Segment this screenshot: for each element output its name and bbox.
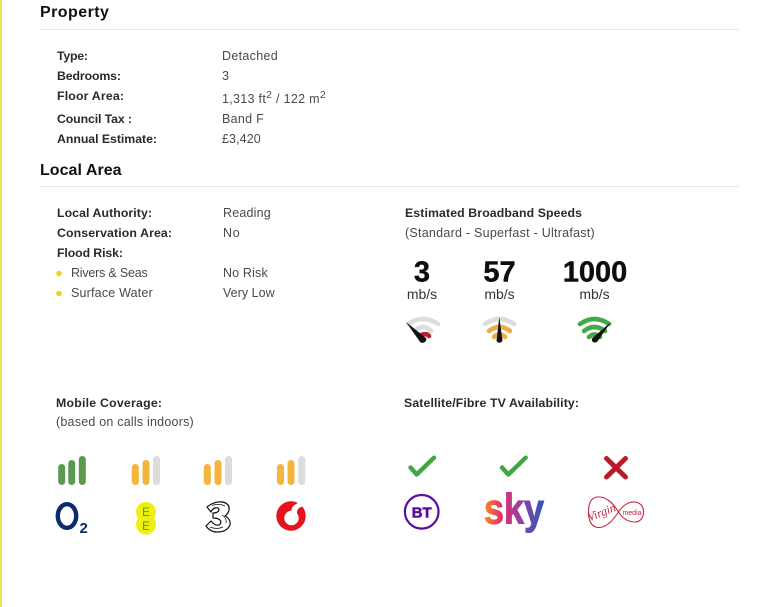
logo: EE [136, 502, 156, 534]
logo: BT [405, 495, 439, 529]
icon: red gauge [406, 319, 438, 343]
row: rivers and seas: Rivers & Seas [71, 266, 148, 280]
logo: EE: E [142, 507, 150, 519]
row: bedrooms: Bedrooms: [57, 69, 121, 83]
row: council tax: Band F [222, 112, 264, 126]
logo: Virgin Media: media [622, 510, 642, 517]
logo: EE: E [142, 521, 150, 533]
row: type: Type: [57, 49, 88, 63]
row: rivers and seas: No Risk [223, 266, 268, 280]
logo: Vodafone [276, 501, 306, 531]
signal bars: O2 [62, 460, 82, 482]
row: surface water [56, 286, 276, 300]
panel: property details [57, 49, 326, 146]
row: floor area: Floor Area: [57, 89, 124, 103]
row: annual estimate [57, 132, 261, 146]
row: rivers and seas [56, 266, 268, 280]
mobile coverage subheading: (based on calls indoors) [56, 415, 194, 429]
logo: Three [206, 502, 230, 532]
row: bedrooms [57, 69, 229, 83]
row: surface water: Very Low [223, 286, 276, 300]
signal bars: Three [207, 460, 228, 482]
signal bars: Vodafone [280, 460, 302, 482]
row: council tax [57, 112, 264, 126]
row: council tax: Council Tax : [57, 112, 132, 126]
icon: BT check [410, 458, 434, 474]
logo: O2: 2 [80, 520, 88, 537]
ultrafast speed: 1000 [563, 256, 627, 288]
standard speed [407, 256, 437, 302]
standard speed: 3 [414, 256, 430, 288]
row: conservation area: Conservation Area: [57, 226, 172, 240]
left yellow page edge [0, 0, 2, 607]
icon: Sky check [502, 458, 526, 474]
row: floor area: 2 [320, 89, 326, 101]
row: annual estimate: £3,420 [222, 132, 261, 146]
broadband heading: Estimated Broadband Speeds [405, 206, 582, 220]
TV availability heading: Satellite/Fibre TV Availability: [404, 396, 579, 410]
icon: green gauge [580, 319, 611, 343]
row: flood risk label: Flood Risk: [57, 246, 123, 260]
icon: amber gauge [485, 317, 514, 343]
heading: Local Area: Local Area [40, 162, 122, 179]
standard speed: mb/s [407, 286, 437, 302]
row: conservation area [57, 226, 240, 240]
row: conservation area: No [223, 226, 240, 240]
superfast speed: mb/s [484, 286, 515, 302]
row: floor area: 1,313 ft [222, 92, 266, 106]
row: type: Detached [222, 49, 278, 63]
row: local authority: Local Authority: [57, 206, 152, 220]
row: surface water: Surface Water [71, 286, 153, 300]
row: annual estimate: Annual Estimate: [57, 132, 157, 146]
row: local authority: Reading [223, 206, 271, 220]
logo: Virgin Media [585, 497, 644, 528]
row: bedrooms: 3 [222, 69, 229, 83]
broadband subheading: (Standard - Superfast - Ultrafast) [405, 226, 595, 240]
panel: mobile coverage [56, 396, 306, 537]
row: type [57, 49, 278, 63]
row: floor area: / 122 m [272, 92, 320, 106]
heading: Property: Property [40, 4, 109, 21]
panel: broadband speeds [405, 206, 627, 343]
row: local authority [57, 206, 271, 220]
logo: Sky: sky [484, 486, 544, 534]
logo: Virgin Media: Virgin [585, 500, 618, 524]
superfast speed: 57 [483, 256, 516, 288]
row: floor area: 2 [266, 89, 272, 101]
logo: O2 [58, 504, 88, 537]
panel: satellite and fibre TV availability [404, 396, 644, 534]
ultrafast speed: mb/s [579, 286, 610, 302]
mobile coverage heading: Mobile Coverage: [56, 396, 162, 410]
signal bars: EE [135, 460, 156, 482]
row: floor area [57, 89, 326, 106]
panel: local area details [56, 206, 276, 300]
logo: BT: BT [412, 504, 432, 522]
icon: Virgin Media cross [606, 458, 626, 477]
